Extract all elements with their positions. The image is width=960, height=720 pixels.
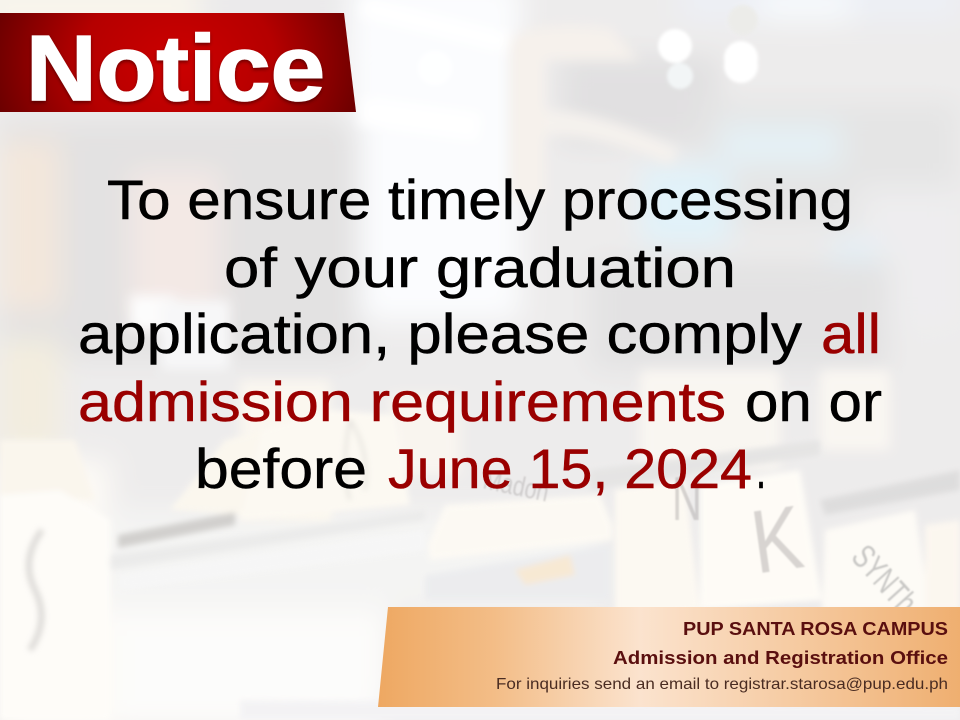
footer panel: office contact	[378, 607, 960, 707]
main message text: application, please comply	[78, 302, 802, 365]
background: blurred archive photo: SYNTh	[844, 538, 924, 621]
main message text: on or	[745, 370, 882, 433]
background: blurred archive photo: K	[745, 487, 809, 593]
campus name: PUP SANTA ROSA CAMPUS	[683, 619, 948, 639]
notice banner	[0, 13, 356, 120]
background: blurred archive photo: Madon	[481, 464, 552, 508]
main message text: of your graduation	[224, 236, 736, 299]
banner background shape	[0, 13, 356, 112]
heading: Notice: Notice	[26, 16, 325, 120]
office name: Admission and Registration Office	[613, 648, 948, 668]
main message text	[78, 168, 882, 500]
main message text: before	[195, 437, 367, 500]
main message text: June 15, 2024	[388, 437, 752, 500]
main message text: .	[756, 437, 766, 500]
main message text: admission requirements	[78, 370, 726, 433]
footer background shape	[378, 607, 960, 707]
inquiry email line: For inquiries send an email to registrar.starosa@pup.edu.ph	[496, 676, 948, 693]
main message text: all	[821, 302, 881, 365]
main message text: To ensure timely processing	[107, 168, 853, 231]
background: blurred archive photo: N	[672, 465, 702, 534]
